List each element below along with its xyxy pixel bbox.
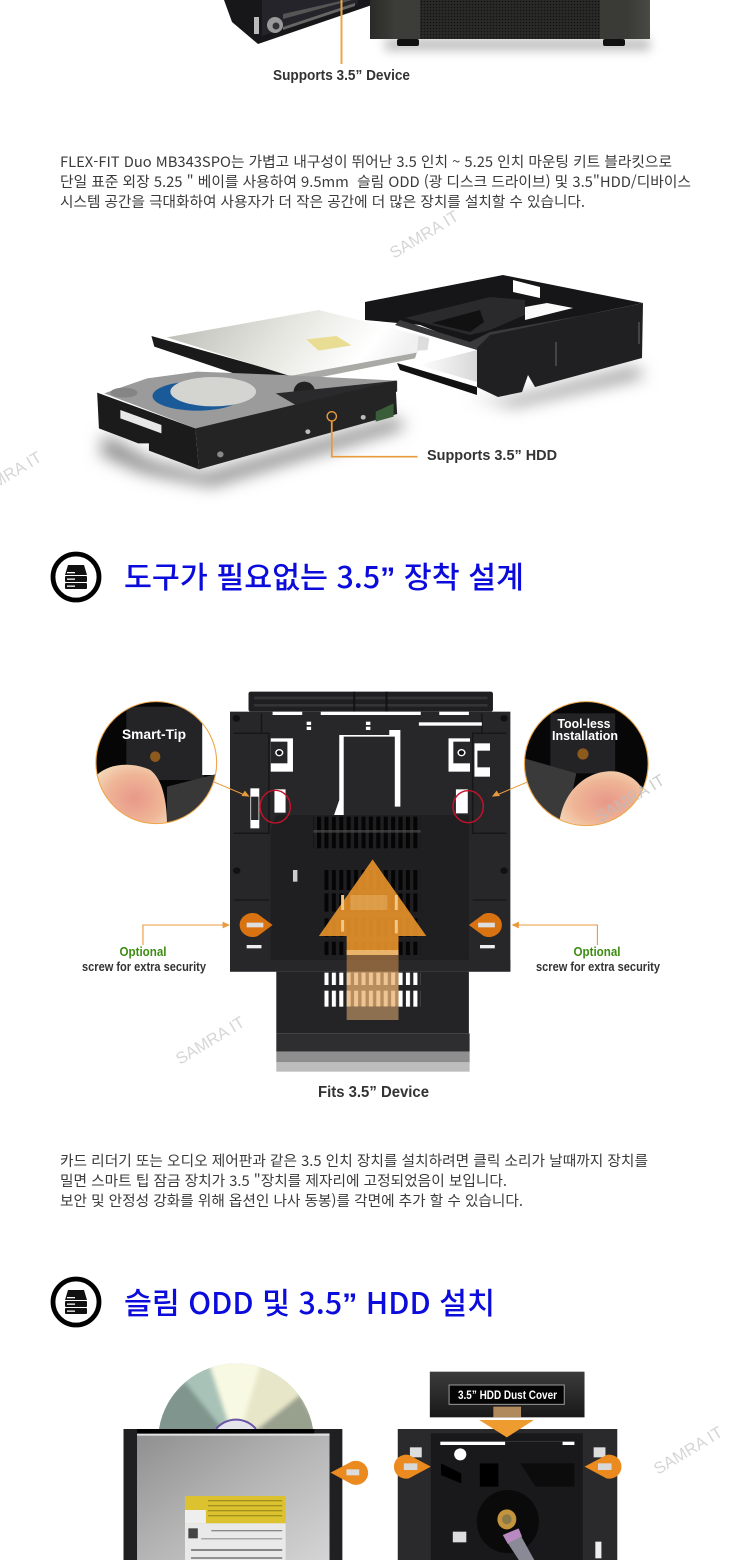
watermark: SAMRA IT: [651, 1423, 726, 1478]
watermark: SAMRA IT: [387, 207, 462, 262]
shadows: [101, 367, 644, 487]
right bracket frame: [398, 1429, 617, 1560]
dust cover: [430, 1372, 585, 1417]
bracket: [365, 275, 643, 397]
caption: optional screw left: screw for extra security: [82, 959, 207, 974]
arrow: [319, 859, 426, 1020]
photo: HDD, slim ODD and bracket: [97, 275, 644, 487]
label: Tool-less Installation: [552, 717, 618, 743]
text block: product intro: 시스템 공간을 극대화하여 사용자가 더 작은 공간에 더 많은 장치를 설치할 수 있습니다.: [60, 191, 585, 212]
icon: server in circle: [53, 554, 99, 600]
top product photo: [224, 0, 650, 84]
text block: installation notes: 밀면 스마트 팁 잠금 장치가 3.5 "장치를 제자리에 고정되었음이 보입니다.: [60, 1170, 507, 1191]
ODD drive body: [137, 1433, 330, 1560]
slim ODD: [151, 310, 429, 388]
icon: server in circle: [53, 1279, 99, 1325]
3.5 HDD: [97, 372, 397, 469]
text block: installation notes: [60, 1150, 648, 1211]
heading: slim ODD and HDD install: 슬림 ODD 및 3.5” HDD 설치: [124, 1279, 495, 1323]
caption: Supports 3.5" HDD: Supports 3.5” HDD: [427, 448, 557, 464]
text block: product intro: [60, 151, 691, 212]
orange connector lines: [143, 782, 597, 945]
caption: optional screw left: Optional: [120, 944, 166, 959]
screw callouts: [240, 913, 502, 948]
photo: tool-less installation diagram: [95, 692, 650, 1072]
caption: Fits 3.5" Device: Fits 3.5” Device: [318, 1084, 429, 1101]
orange leader line: [340, 0, 342, 64]
screw callouts: [394, 1455, 621, 1479]
dust cover label plate: [449, 1385, 564, 1404]
caption: Supports 3.5" Device: Supports 3.5” Device: [273, 68, 410, 84]
ODD yellow label: [185, 1496, 286, 1560]
photo: HDD side with dust cover: [394, 1372, 621, 1560]
left bracket frame: [124, 1429, 342, 1560]
text block: product intro: 단일 표준 외장 5.25 " 베이를 사용하여 9.5mm 슬림 ODD (광 디스크 드라이브) 및 3.5"HDD/디바이스: [60, 171, 691, 192]
red highlight circles: [260, 790, 483, 823]
label: dust cover: 3.5” HDD Dust Cover: [458, 1388, 557, 1402]
photo: disc and slim ODD in bracket: [124, 1360, 368, 1560]
text block: product intro: FLEX-FIT Duo MB343SPO는 가볍고 내구성이 뛰어난 3.5 인치 ~ 5.25 인치 마운팅 키트 블라킷으로: [60, 151, 672, 172]
caption: optional screw right: [536, 944, 661, 974]
caption: optional screw right: Optional: [574, 944, 620, 959]
text block: installation notes: 보안 및 안정성 강화를 위해 옵션인 나사 동봉)를 각면에 추가 할 수 있습니다.: [60, 1190, 523, 1211]
sliding device: [230, 815, 510, 1072]
optical disc: [159, 1364, 313, 1429]
screw callout: [331, 1461, 368, 1485]
label: Tool-less Installation: Installation: [552, 729, 618, 743]
caption: optional screw right: screw for extra security: [536, 959, 661, 974]
caption: optional screw left: [82, 944, 207, 974]
heading: tool-free design: 도구가 필요없는 3.5” 장착 설계: [124, 553, 524, 597]
photo: enclosure: [370, 0, 650, 51]
label: Tool-less Installation: Tool-less: [558, 717, 611, 731]
main frame: [230, 712, 510, 972]
text block: installation notes: 카드 리더기 또는 오디오 제어판과 같은 3.5 인치 장치를 설치하려면 클릭 소리가 날때까지 장치를: [60, 1150, 648, 1171]
label: Smart-Tip: Smart-Tip: [122, 727, 186, 742]
circle: Smart-Tip close-up: [95, 700, 219, 827]
orange arrow down: [479, 1420, 534, 1437]
watermark: SAMRA IT: [173, 1013, 248, 1068]
circle: Tool-less Installation close-up: [523, 700, 650, 828]
orange leader with ring: [327, 412, 417, 457]
photo: locking drive bay: [224, 0, 372, 44]
watermark: SAMRA IT: [593, 771, 668, 826]
top bar: [249, 692, 493, 712]
